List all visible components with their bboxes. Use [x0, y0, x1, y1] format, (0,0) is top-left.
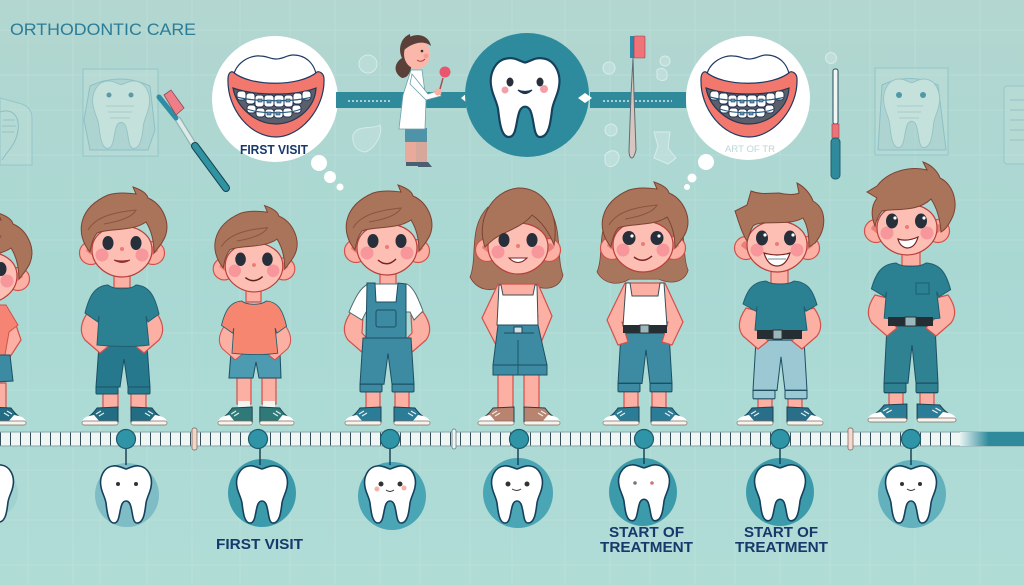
figure: child 4 in overalls [344, 185, 432, 425]
figure: child 5 girl in denim shorts [470, 188, 563, 425]
label: start of treatment 1: TREATMENT [600, 539, 693, 556]
figure: child 3 boy in coral tee [213, 206, 297, 425]
figure: child 2 boy in teal tee [80, 187, 167, 425]
label: first visit: FIRST VISIT [216, 536, 303, 553]
milestone 5 tooth [609, 430, 677, 526]
decorative aligner shapes right [603, 56, 676, 167]
title: ORTHODONTIC CARE [10, 20, 196, 39]
icon: upright toothbrush [629, 36, 645, 158]
icon: dental instrument [826, 52, 840, 179]
panel: faint tooth card right [875, 68, 948, 155]
label: start of treatment 2: START OF [744, 524, 818, 541]
milestone 0: cropped tooth [0, 465, 18, 522]
label: first visit: FIRST VISIT [240, 143, 308, 157]
figure: child 1 (cropped) [0, 213, 32, 425]
label: start of treatment 2: TREATMENT [735, 539, 828, 556]
milestone 4 tooth [483, 430, 553, 528]
milestone 7 tooth [878, 430, 946, 528]
figure: child 6 girl in capri jeans [597, 182, 688, 425]
callout: start of treatment mouth [684, 36, 810, 190]
panel: faint tooth card far left [0, 98, 32, 165]
label: start of treatment 1: START OF [609, 524, 684, 541]
timeline ruler [0, 428, 1024, 450]
milestone 3 tooth [358, 430, 426, 530]
connector bar right [578, 92, 686, 108]
icon: main smiling tooth [465, 33, 589, 157]
milestone 6 tooth [746, 430, 814, 526]
figure: dentist [396, 34, 450, 167]
panel: faint tooth card left [83, 69, 158, 156]
decorative aligner shapes left [353, 55, 381, 152]
figure: child 7 boy with braces [734, 183, 824, 425]
callout: first visit mouth [212, 36, 344, 190]
figure: child 8 tallest boy [864, 162, 956, 422]
label: faded text: ART OF TR [725, 144, 776, 154]
icon: toothbrush left [159, 90, 226, 188]
panel: faint card far right [1004, 86, 1024, 164]
milestone 2 tooth [228, 430, 296, 527]
milestone 1 tooth [95, 430, 159, 527]
connector bar left [336, 92, 473, 108]
